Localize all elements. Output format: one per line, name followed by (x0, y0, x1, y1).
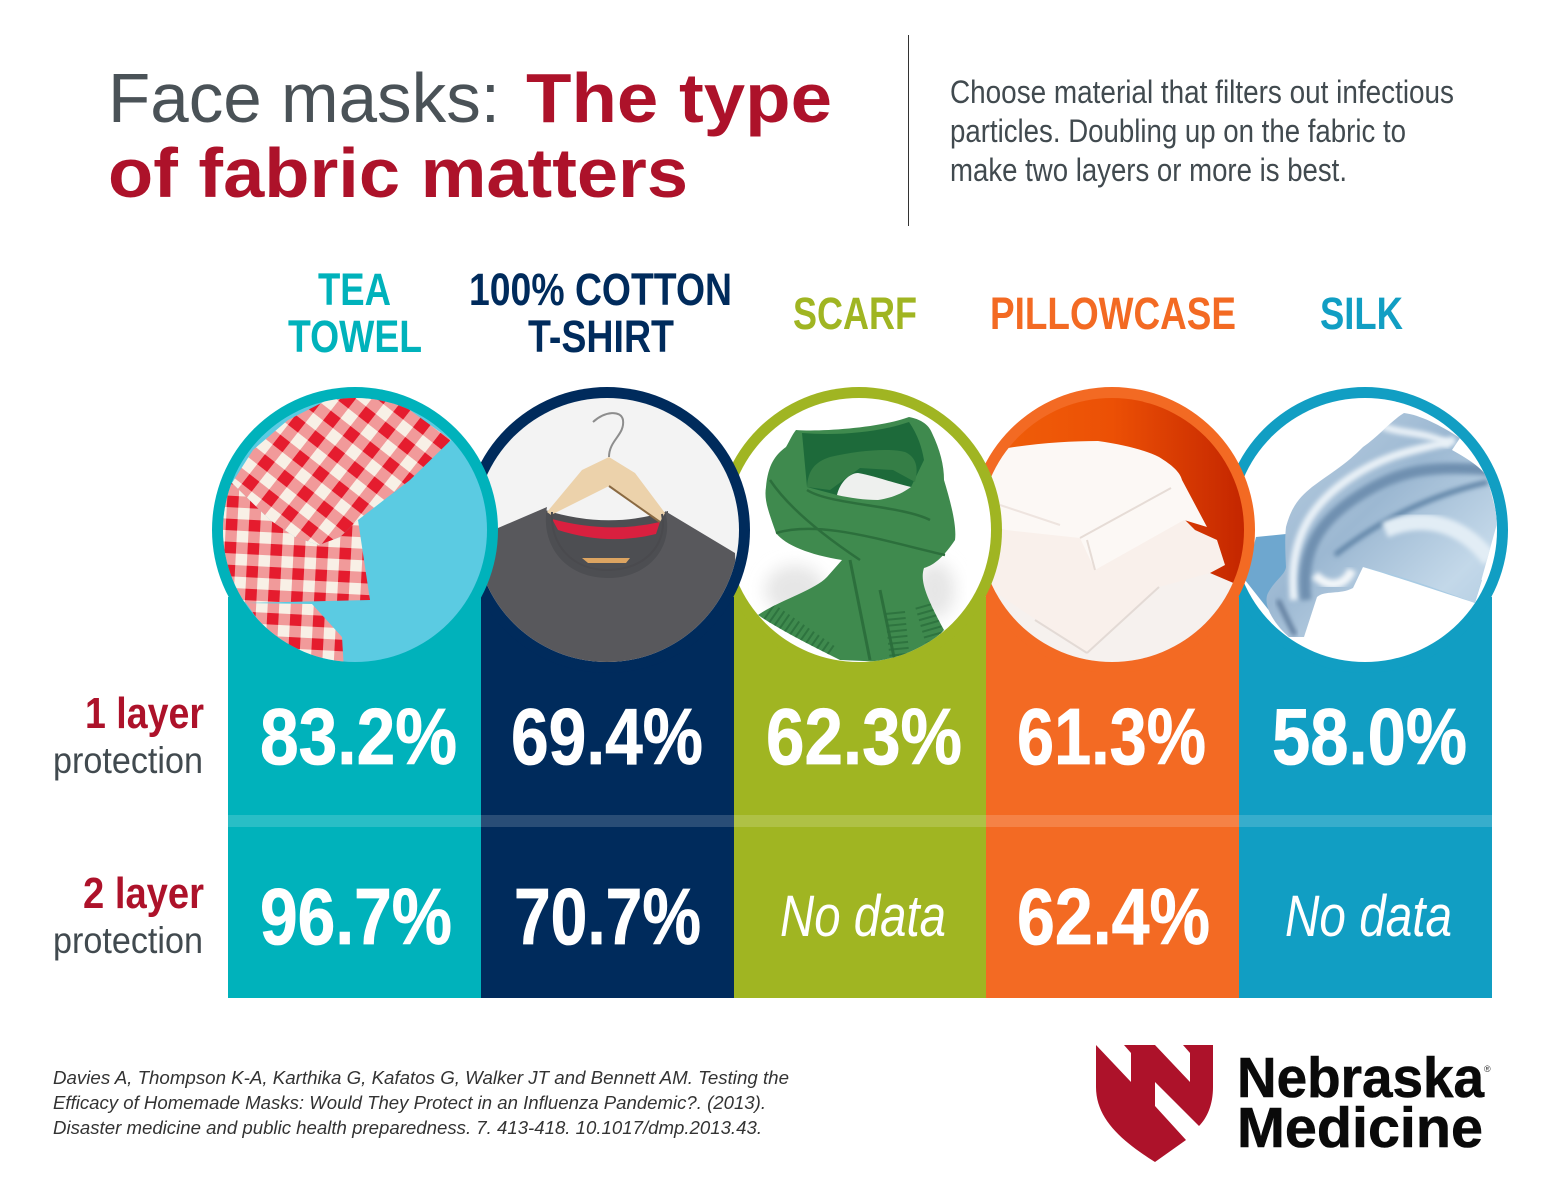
value: t-shirt 2 layer: 70.7% (514, 872, 701, 961)
panel: pillowcase (969, 288, 1255, 998)
citation (53, 1068, 789, 1138)
title: The type (526, 59, 832, 137)
icon: scarf photo (758, 417, 955, 662)
row label: 2 layer protection: 2 layer (83, 869, 204, 918)
citation: Davies A, Thompson K-A, Karthika G, Kafatos G, Walker JT and Bennett AM. Testing the (53, 1068, 789, 1088)
value: silk 1 layer: 58.0% (1272, 692, 1467, 781)
intro text: Choose material that filters out infectious (950, 74, 1454, 110)
row label: 1 layer protection: 1 layer (85, 689, 204, 738)
panel: silk: SILK (1320, 288, 1403, 339)
panel: 100% cotton t-shirt: 100% COTTON (469, 264, 732, 315)
intro text: make two layers or more is best. (950, 152, 1347, 188)
icon: t-shirt on hanger photo (480, 413, 740, 670)
row label: 1 layer protection: protection (53, 740, 203, 781)
row label: 2 layer protection (53, 869, 204, 961)
citation: Efficacy of Homemade Masks: Would They Protect in an Influenza Pandemic?. (2013). (53, 1093, 766, 1113)
wordmark (1237, 1046, 1491, 1160)
logo: Nebraska Medicine (1096, 1045, 1491, 1162)
panel: scarf (716, 288, 1002, 998)
icon: shield (1096, 1045, 1213, 1162)
panel: silk (1222, 288, 1510, 998)
row label: 1 layer protection (53, 689, 204, 781)
icon: pillow photo (992, 441, 1233, 662)
wordmark: Medicine (1237, 1096, 1483, 1160)
panel: 100% cotton t-shirt: T-SHIRT (528, 311, 674, 362)
title: Face masks: (108, 59, 500, 137)
panel: tea towel: TEA (318, 264, 391, 315)
panel: 100% cotton t-shirt (464, 264, 750, 998)
value: scarf 2 layer: No data (780, 884, 946, 949)
panel: scarf: SCARF (793, 288, 917, 339)
panel: tea towel (212, 264, 498, 998)
value: pillowcase 1 layer: 61.3% (1017, 692, 1206, 781)
citation: Disaster medicine and public health preparedness. 7. 413-418. 10.1017/dmp.2013.43. (53, 1118, 762, 1138)
intro text (950, 74, 1454, 188)
row label: 2 layer protection: protection (53, 920, 203, 961)
value: tea towel 2 layer: 96.7% (260, 872, 452, 961)
wordmark: Nebraska (1237, 1046, 1485, 1110)
intro text: particles. Doubling up on the fabric to (950, 113, 1406, 149)
value: pillowcase 2 layer: 62.4% (1017, 872, 1210, 961)
value: scarf 1 layer: 62.3% (766, 692, 962, 781)
panel: tea towel: TOWEL (288, 311, 422, 362)
title (108, 59, 832, 212)
panel: pillowcase: PILLOWCASE (990, 288, 1236, 339)
value: t-shirt 1 layer: 69.4% (511, 692, 703, 781)
wordmark: ® (1484, 1064, 1491, 1074)
title: of fabric matters (108, 134, 688, 212)
value: tea towel 1 layer: 83.2% (260, 692, 457, 781)
value: silk 2 layer: No data (1285, 884, 1452, 949)
icon: silk photo (1246, 413, 1497, 637)
icon: gingham tea towel photo (215, 390, 451, 670)
